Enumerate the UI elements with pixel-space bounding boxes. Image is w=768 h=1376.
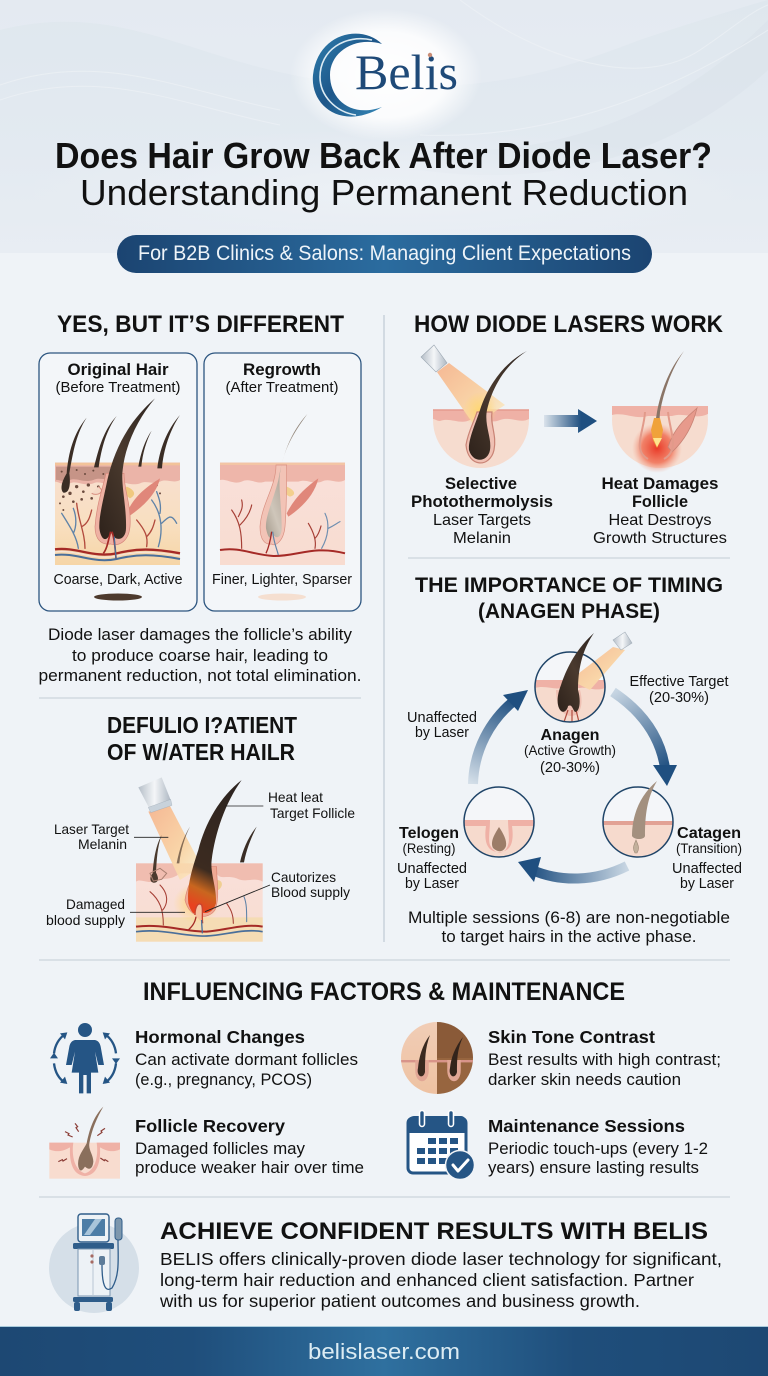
text: explanation <box>38 625 362 685</box>
label: damaged blood supply <box>46 896 125 928</box>
card: regrowth <box>204 353 361 611</box>
footer: belislaser.com <box>308 1339 460 1364</box>
label: anagen <box>524 727 616 776</box>
label: telogen: by Laser <box>405 876 459 892</box>
label: effective target: (20-30%) <box>649 690 709 706</box>
vertical divider <box>383 315 385 942</box>
text: maintenance sessions: Maintenance Sessions <box>488 1116 685 1136</box>
card: original hair: (Before Treatment) <box>56 380 180 396</box>
label: telogen: Telogen <box>399 825 459 842</box>
heading: importance of timing <box>415 573 723 623</box>
text: follicle recovery: produce weaker hair over time <box>135 1158 364 1177</box>
text: multiple sessions: to target hairs in the active phase. <box>442 927 696 946</box>
text: maintenance sessions: years) ensure lasting results <box>488 1158 699 1177</box>
label: effective target <box>630 674 728 706</box>
icon: telogen circle <box>464 787 534 857</box>
heading: how diode lasers work: HOW DIODE LASERS WORK <box>414 311 724 338</box>
heading: achieve confident results: ACHIEVE CONFIDENT RESULTS WITH BELIS <box>160 1218 708 1245</box>
label: catagen: Catagen <box>677 825 741 842</box>
label: effective target: Effective Target <box>630 674 728 690</box>
label: anagen: Anagen <box>540 727 600 744</box>
icon: anagen circle <box>535 632 632 722</box>
subtitle pill <box>117 235 652 273</box>
card: regrowth: Finer, Lighter, Sparser <box>212 572 352 588</box>
text: multiple sessions <box>408 908 730 946</box>
text: follicle recovery <box>135 1116 364 1177</box>
label: laser target melanin: Melanin <box>78 836 127 852</box>
text: heat damages follicle: Heat Destroys <box>608 512 712 529</box>
logo: Belis <box>290 9 482 141</box>
label: laser target melanin <box>54 821 129 852</box>
icon: selective photothermolysis <box>421 345 529 468</box>
panel: timing cycle <box>397 573 742 946</box>
illustration: laser on follicle <box>130 777 270 942</box>
label: cautorizes blood supply: Blood supply <box>271 884 350 900</box>
heading: garbled diagram title: OF W/ATER HAILR <box>107 739 295 765</box>
label: damaged blood supply: Damaged <box>66 896 125 912</box>
text: selective photothermolysis: Laser Targets <box>433 512 531 529</box>
text: hormonal changes: Can activate dormant follicles <box>135 1050 358 1069</box>
text: heat damages follicle: Follicle <box>632 493 688 511</box>
text: explanation: to produce coarse hair, leading to <box>72 646 328 665</box>
panel: yes, but it's different <box>38 311 362 685</box>
text: skin tone contrast: Skin Tone Contrast <box>488 1027 655 1047</box>
card: regrowth: Regrowth <box>243 361 321 379</box>
heading: importance of timing: THE IMPORTANCE OF TIMING <box>415 573 723 597</box>
text: heat damages follicle <box>593 475 727 547</box>
text: skin tone contrast <box>488 1027 721 1089</box>
text: selective photothermolysis: Selective <box>445 475 517 493</box>
divider <box>39 697 361 699</box>
icon: diode laser machine <box>49 1214 139 1313</box>
heading: garbled diagram title: DEFULIO I?ATIENT <box>107 712 297 738</box>
text: hormonal changes <box>135 1027 358 1089</box>
label: unaffected by laser <box>407 710 477 741</box>
title: Does Hair Grow Back After Diode Laser? <box>55 135 712 176</box>
illustration: thick hair cross-section <box>55 398 180 565</box>
text: skin tone contrast: Best results with high contrast; <box>488 1050 721 1069</box>
label: catagen: Unaffected <box>672 861 742 877</box>
label: damaged blood supply: blood supply <box>46 912 125 928</box>
panel: follicle diagram <box>46 712 355 942</box>
text: heat damages follicle: Growth Structures <box>593 530 727 547</box>
text: follicle recovery: Follicle Recovery <box>135 1116 285 1136</box>
divider <box>39 1196 730 1198</box>
arrow: telogen to anagen <box>473 690 528 784</box>
label: unaffected by laser: by Laser <box>415 725 469 741</box>
label: telogen: Unaffected <box>397 861 467 877</box>
illustration: fine hair cross-section <box>220 414 345 565</box>
icon: skin tone contrast <box>401 1022 474 1094</box>
panel: influencing factors <box>49 978 721 1180</box>
label: catagen: by Laser <box>680 876 734 892</box>
title: Understanding Permanent Reduction <box>80 172 688 213</box>
arrow: anagen to catagen <box>613 692 677 786</box>
panel: how diode lasers work <box>411 311 727 547</box>
divider <box>408 557 730 559</box>
text: belis offer <box>159 1249 722 1311</box>
label: telogen: (Resting) <box>402 840 456 856</box>
label: cautorizes blood supply <box>271 869 350 900</box>
card: original hair: Original Hair <box>68 361 169 379</box>
text: skin tone contrast: darker skin needs caution <box>488 1070 681 1089</box>
label: anagen: (Active Growth) <box>524 742 616 758</box>
label: telogen <box>397 825 467 892</box>
subtitle pill: For B2B Clinics & Salons: Managing Client Expectations <box>138 242 631 265</box>
logo: Belis: Belis <box>355 44 458 100</box>
text: maintenance sessions <box>488 1116 708 1177</box>
text: follicle recovery: Damaged follicles may <box>135 1139 305 1158</box>
label: heat leat target follicle: Heat leat <box>268 789 323 805</box>
text: selective photothermolysis: Melanin <box>453 530 511 547</box>
text: belis offer: long-term hair reduction and enhanced client satisfaction. Partner <box>160 1270 694 1290</box>
divider <box>39 959 730 961</box>
icon: calendar with check <box>408 1113 474 1180</box>
text: hormonal changes: Hormonal Changes <box>135 1027 305 1047</box>
title <box>55 135 712 213</box>
text: explanation: Diode laser damages the follicle’s ability <box>48 625 352 644</box>
label: cautorizes blood supply: Cautorizes <box>271 869 336 885</box>
text: explanation: permanent reduction, not total elimination. <box>38 666 362 685</box>
icon: heat damages follicle <box>612 351 708 473</box>
label: laser target melanin: Laser Target <box>54 821 129 837</box>
label: unaffected by laser: Unaffected <box>407 710 477 726</box>
label: heat leat target follicle: Target Follicle <box>270 805 355 821</box>
arrow: catagen to telogen <box>518 857 627 882</box>
text: belis offer: BELIS offers clinically-proven diode laser technology for significant, <box>160 1249 722 1269</box>
text: maintenance sessions: Periodic touch-ups (every 1-2 <box>488 1139 708 1158</box>
text: multiple sessions: Multiple sessions (6-8) are non-negotiable <box>408 908 730 927</box>
text: selective photothermolysis <box>411 475 553 547</box>
card: regrowth: (After Treatment) <box>226 380 338 396</box>
label: catagen <box>672 825 742 892</box>
card: original hair <box>39 353 197 611</box>
text: hormonal changes: (e.g., pregnancy, PCOS) <box>135 1070 312 1089</box>
text: heat damages follicle: Heat Damages <box>602 475 718 493</box>
icon: hormonal changes <box>50 1023 120 1093</box>
heading: influencing factors: INFLUENCING FACTORS & MAINTENANCE <box>143 978 625 1006</box>
footer <box>0 1326 768 1376</box>
label: catagen: (Transition) <box>676 840 742 856</box>
icon: catagen circle <box>603 781 673 857</box>
icon: follicle recovery <box>49 1107 120 1179</box>
heading: importance of timing: (ANAGEN PHASE) <box>478 599 660 623</box>
label: anagen: (20-30%) <box>540 760 600 776</box>
text: belis offer: with us for superior patient outcomes and business growth. <box>159 1291 640 1311</box>
label: heat leat target follicle <box>268 789 355 821</box>
text: selective photothermolysis: Photothermolysis <box>411 493 553 511</box>
heading: garbled diagram title <box>107 712 297 765</box>
header background with waves <box>0 0 768 253</box>
panel: call to action <box>49 1214 722 1313</box>
card: original hair: Coarse, Dark, Active <box>54 572 182 588</box>
arrow: laser to damage <box>544 409 597 433</box>
heading: yes but different: YES, BUT IT’S DIFFERENT <box>57 311 344 338</box>
